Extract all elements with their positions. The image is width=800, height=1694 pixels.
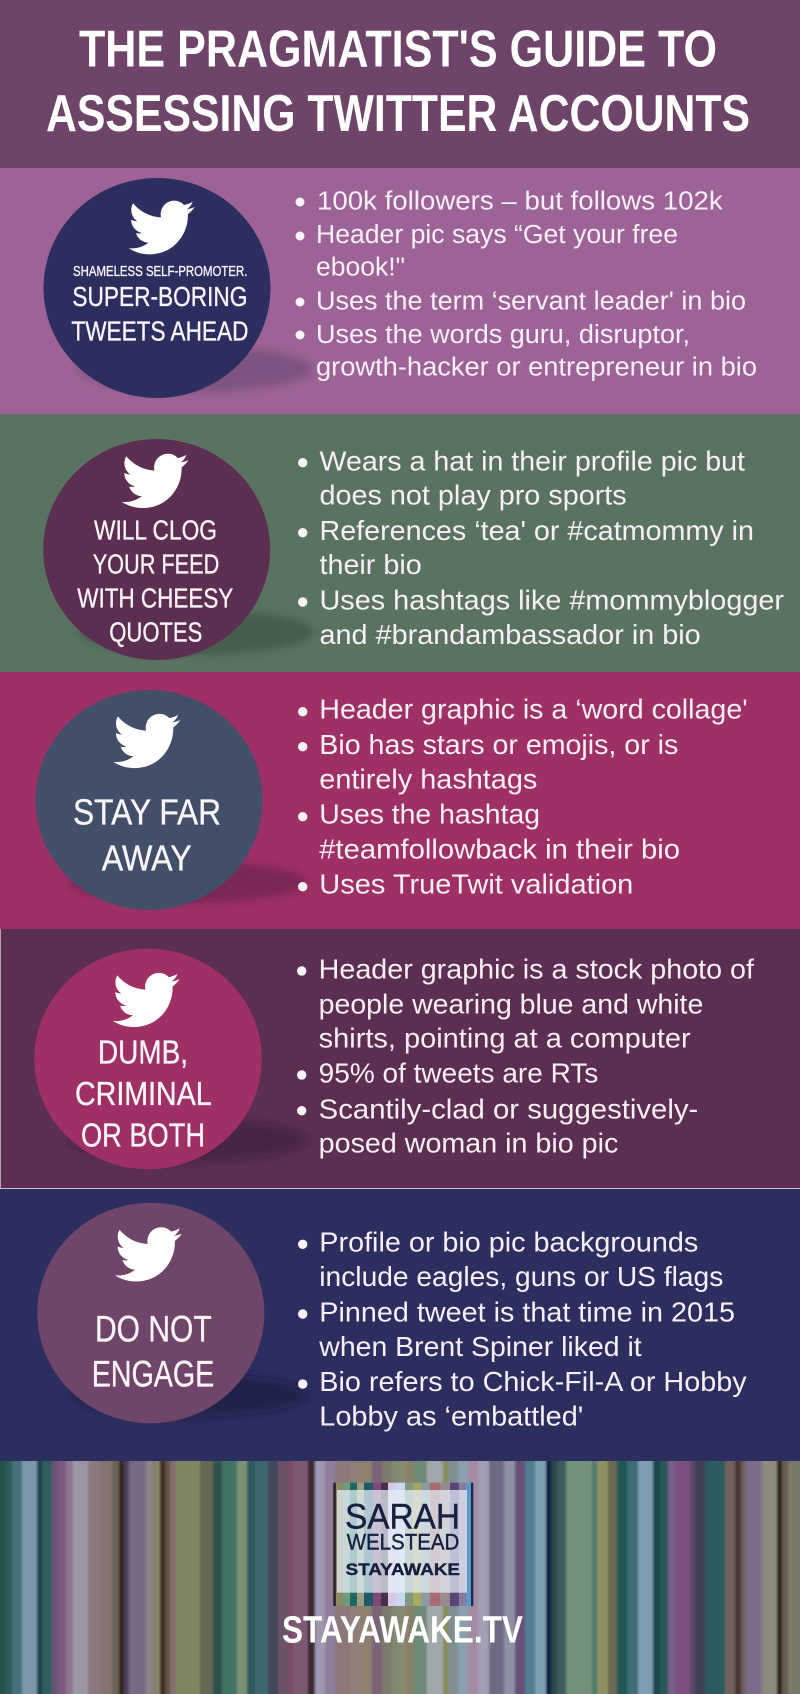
badge label: SUPER-BORING xyxy=(72,281,247,312)
panel: shameless self-promoter xyxy=(0,168,800,414)
bullet list: shirts, pointing at a computer xyxy=(319,1023,691,1054)
bullet list: posed woman in bio pic xyxy=(319,1127,619,1158)
bullet list: people wearing blue and white xyxy=(319,988,703,1019)
badge label xyxy=(75,1033,212,1154)
bullet list: ebook!" xyxy=(316,254,405,282)
badge label: YOUR FEED xyxy=(93,548,219,579)
bullet list: Uses hashtags like #mommyblogger xyxy=(320,584,784,615)
bullet list xyxy=(298,1227,747,1432)
badge label: ENGAGE xyxy=(92,1354,214,1395)
badge label: QUOTES xyxy=(109,617,202,648)
website link text: STAYAWAKE.TV xyxy=(282,1610,524,1652)
logo text xyxy=(345,1497,460,1579)
badge label xyxy=(92,1309,214,1395)
bullet list: References ‘tea' or #catmommy in xyxy=(320,515,754,546)
bullet list: Lobby as ‘embattled' xyxy=(319,1401,583,1432)
logo text: WELSTEAD xyxy=(347,1529,459,1554)
bullet list: Bio refers to Chick-Fil-A or Hobby xyxy=(319,1366,747,1397)
badge: cheesy quotes xyxy=(43,439,270,660)
striped background xyxy=(0,1461,800,1694)
panel: dumb, criminal or both xyxy=(0,929,800,1189)
bullet list: #teamfollowback in their bio xyxy=(319,833,680,864)
badge label: WITH CHEESY xyxy=(77,583,234,614)
bullet list: Header graphic is a ‘word collage' xyxy=(319,693,748,724)
bullet list xyxy=(298,693,748,899)
badge label: STAY FAR xyxy=(73,791,221,832)
bullet list xyxy=(296,188,757,381)
icon: twitter bird xyxy=(113,973,179,1027)
badge label: SHAMELESS SELF-PROMOTER. xyxy=(73,264,247,280)
badge: do not engage xyxy=(37,1203,264,1423)
bullet list: Header pic says “Get your free xyxy=(316,221,678,249)
bullet list: Profile or bio pic backgrounds xyxy=(319,1227,698,1258)
bullet list: Uses the term ‘servant leader' in bio xyxy=(316,288,746,316)
badge shadow xyxy=(79,346,313,392)
panel: header xyxy=(0,0,800,168)
logo panel xyxy=(337,1490,467,1593)
badge shadow xyxy=(69,1118,307,1162)
panel: footer xyxy=(0,1461,800,1694)
badge shadow xyxy=(72,1373,308,1417)
logo text: SARAH xyxy=(345,1497,460,1536)
badge label: WILL CLOG xyxy=(94,514,217,545)
badge label xyxy=(73,791,221,879)
logo text: STAYAWAKE xyxy=(346,1560,460,1579)
badge label xyxy=(77,514,234,648)
badge label: DUMB, xyxy=(98,1033,188,1070)
bullet list xyxy=(298,446,784,650)
panel: cheesy quotes xyxy=(0,414,800,672)
badge label: OR BOTH xyxy=(81,1117,205,1154)
badge label: DO NOT xyxy=(95,1309,212,1350)
bullet list: 100k followers – but follows 102k xyxy=(317,188,723,216)
bullet list: and #brandambassador in bio xyxy=(320,619,701,650)
logo: Sarah Welstead Stayawake xyxy=(333,1483,473,1606)
bullet list: Pinned tweet is that time in 2015 xyxy=(319,1297,735,1328)
bullet list: include eagles, guns or US flags xyxy=(319,1261,723,1292)
badge: stay far away xyxy=(36,690,262,910)
bullet list: Scantily-clad or suggestively- xyxy=(319,1093,698,1124)
badge: shameless self-promoter xyxy=(44,178,270,398)
bullet list: when Brent Spiner liked it xyxy=(318,1331,642,1362)
bullet list: their bio xyxy=(320,549,422,580)
badge label: CRIMINAL xyxy=(75,1075,212,1112)
badge shadow xyxy=(69,861,307,903)
badge: dumb, criminal or both xyxy=(34,949,262,1169)
bullet list: 95% of tweets are RTs xyxy=(319,1058,598,1089)
badge label: TWEETS AHEAD xyxy=(71,316,248,347)
bullet list: Header graphic is a stock photo of xyxy=(319,953,754,984)
bullet list: growth-hacker or entrepreneur in bio xyxy=(316,353,757,381)
bullet list: Wears a hat in their profile pic but xyxy=(320,446,745,477)
title xyxy=(46,21,750,143)
bullet list: entirely hashtags xyxy=(319,763,537,794)
badge label xyxy=(71,264,248,347)
icon: twitter bird xyxy=(115,1227,182,1281)
icon: twitter bird xyxy=(122,454,188,508)
icon: twitter bird xyxy=(113,714,180,768)
panel: stay far away xyxy=(0,672,800,929)
bullet list: Bio has stars or emojis, or is xyxy=(319,729,678,760)
bullet list: does not play pro sports xyxy=(320,479,627,510)
panel: do not engage xyxy=(0,1189,800,1461)
bullet list: Uses the words guru, disruptor, xyxy=(316,321,690,349)
bullet list: Uses the hashtag xyxy=(319,798,540,829)
bullet list xyxy=(297,953,754,1158)
bullet list: Uses TrueTwit validation xyxy=(319,868,633,899)
icon: twitter bird xyxy=(129,201,195,254)
badge label: AWAY xyxy=(102,838,192,879)
badge shadow xyxy=(78,609,314,655)
